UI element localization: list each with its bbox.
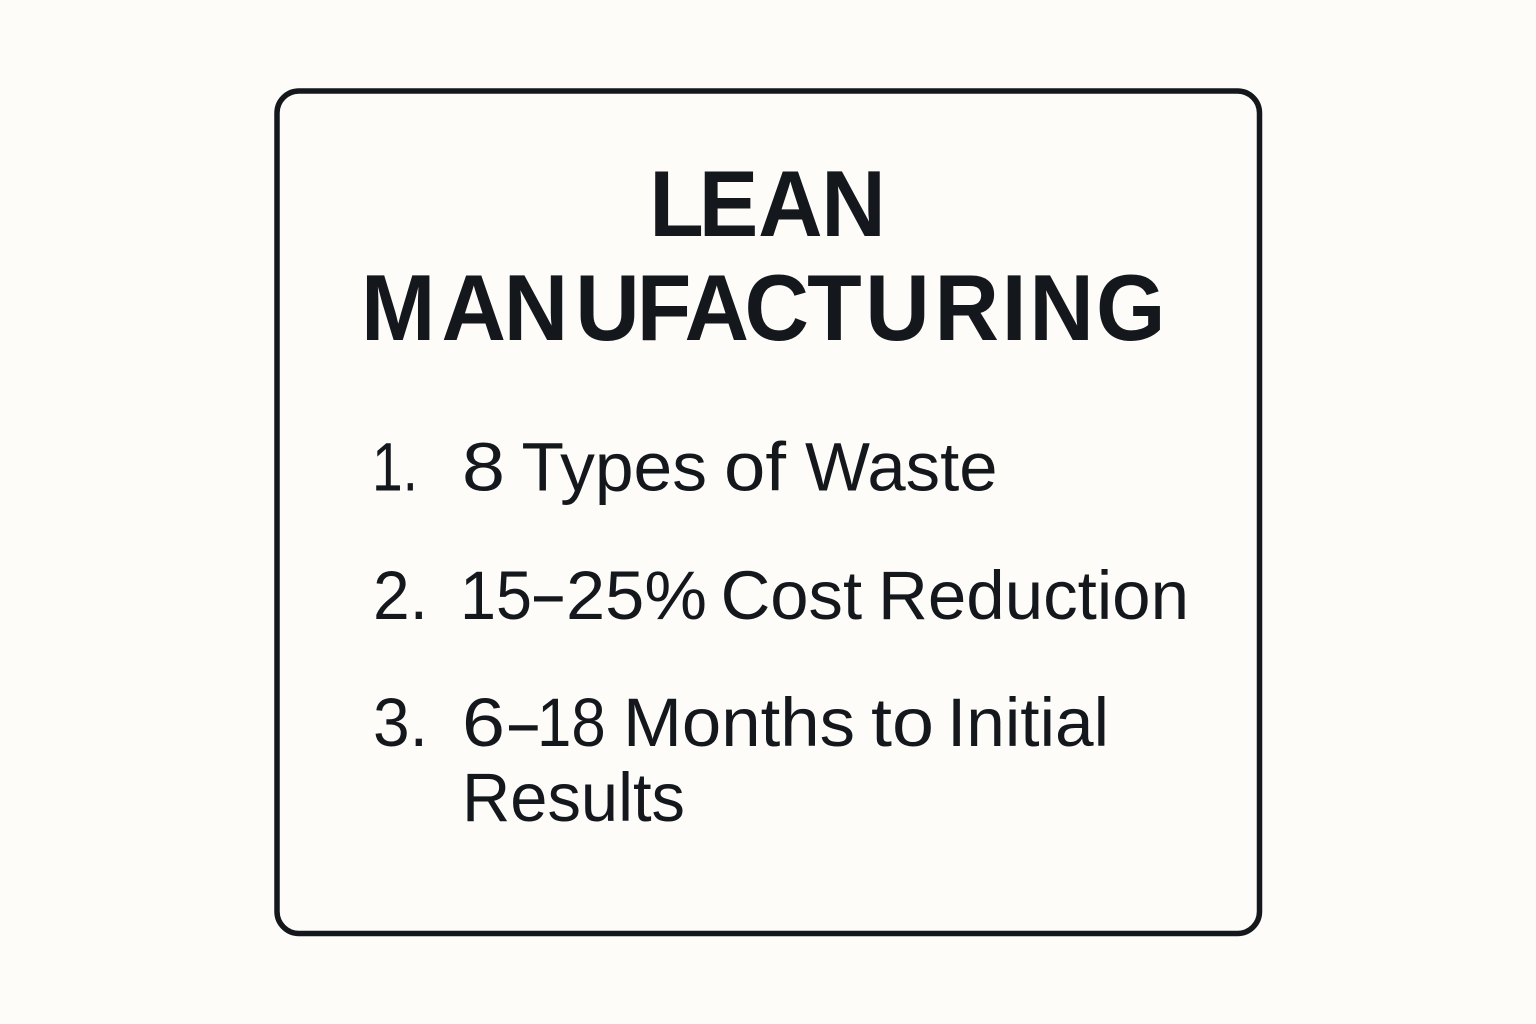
list item 1 <box>372 428 998 506</box>
list item 1: of <box>724 428 787 506</box>
list item 2: Cost <box>721 557 862 634</box>
list item 2: Reduction <box>878 557 1189 634</box>
list item 3: 18 <box>537 684 606 761</box>
list item 3: Results <box>462 759 685 836</box>
list item 1: Types <box>522 428 707 506</box>
list item 1: 8 <box>462 428 505 506</box>
list item 3: Months <box>623 684 855 761</box>
list item 2: 25% <box>566 557 707 634</box>
list item 1: 1. <box>372 428 418 506</box>
list item 3: 3. <box>373 684 428 761</box>
list item 2: – <box>535 569 562 622</box>
list item 2: 15 <box>460 557 532 634</box>
title <box>361 152 1165 361</box>
list item 2: 2. <box>373 557 428 634</box>
list item 3: – <box>510 698 537 751</box>
list item 3: to <box>871 684 934 761</box>
title: LEAN <box>649 152 886 257</box>
list item 3: Initial <box>947 684 1109 761</box>
list item 1: Waste <box>805 428 998 506</box>
list item 2 <box>373 557 1189 634</box>
list item 3 <box>373 684 1109 836</box>
list item 3: 6 <box>462 684 505 761</box>
panel: lean manufacturing card <box>277 91 1260 934</box>
title: MANUFACTURING <box>361 256 1165 361</box>
